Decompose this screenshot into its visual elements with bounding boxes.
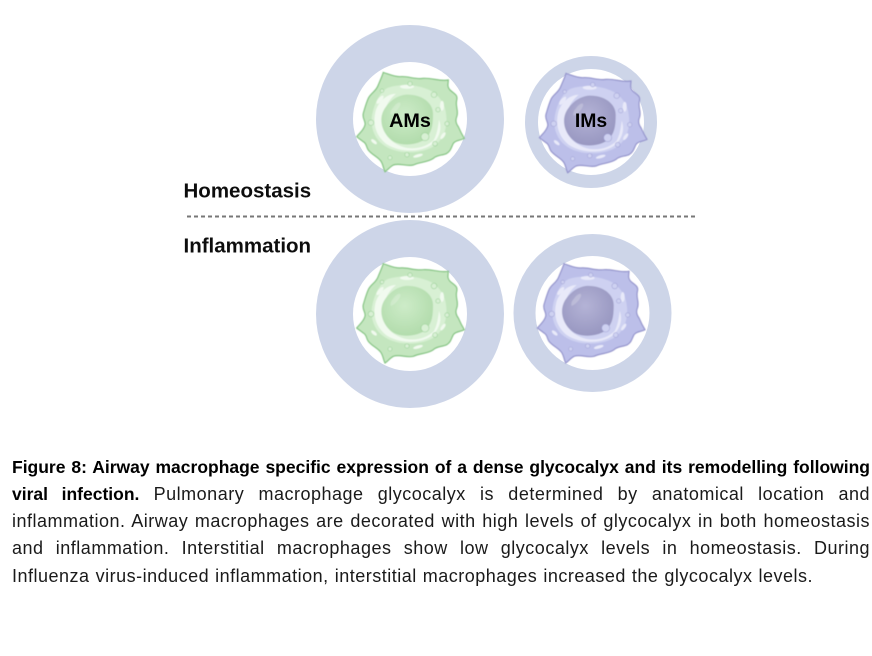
- caption text: viral infection. Pulmonary macrophage glycocalyx is determined by anatomical location and: [12, 484, 870, 504]
- divider: dashed line: [187, 216, 697, 218]
- figure: macrophage glycocalyx diagram: [184, 25, 695, 408]
- icon: IM cell inflammation: [537, 264, 645, 363]
- label: Homeostasis: Homeostasis: [184, 180, 311, 202]
- caption text: [12, 456, 870, 586]
- ring: AMs homeostasis glycocalyx: [334, 44, 486, 194]
- ring: IMs homeostasis glycocalyx: [532, 62, 650, 182]
- icon: AM cell homeostasis: [357, 72, 464, 172]
- caption text: and inflammation. Interstitial macrophages show low glycocalyx levels in homeostasis. During: [12, 538, 870, 558]
- caption text: Influenza virus-induced inflammation, interstitial macrophages increased the glycocalyx levels.: [12, 566, 813, 586]
- caption text: inflammation. Airway macrophages are decorated with high levels of glycocalyx in both homeostasis: [12, 511, 870, 531]
- ring: AMs inflammation glycocalyx: [334, 238, 486, 390]
- caption text: Figure 8: Airway macrophage specific expression of a dense glycocalyx and its remodelling following: [12, 456, 870, 476]
- label: IMs: IMs: [575, 110, 607, 132]
- label: Inflammation: Inflammation: [184, 234, 311, 258]
- icon: IM cell homeostasis: [539, 73, 647, 173]
- icon: AM cell inflammation: [357, 264, 464, 363]
- label: AMs: AMs: [389, 110, 431, 132]
- ring: IMs inflammation glycocalyx: [524, 245, 660, 381]
